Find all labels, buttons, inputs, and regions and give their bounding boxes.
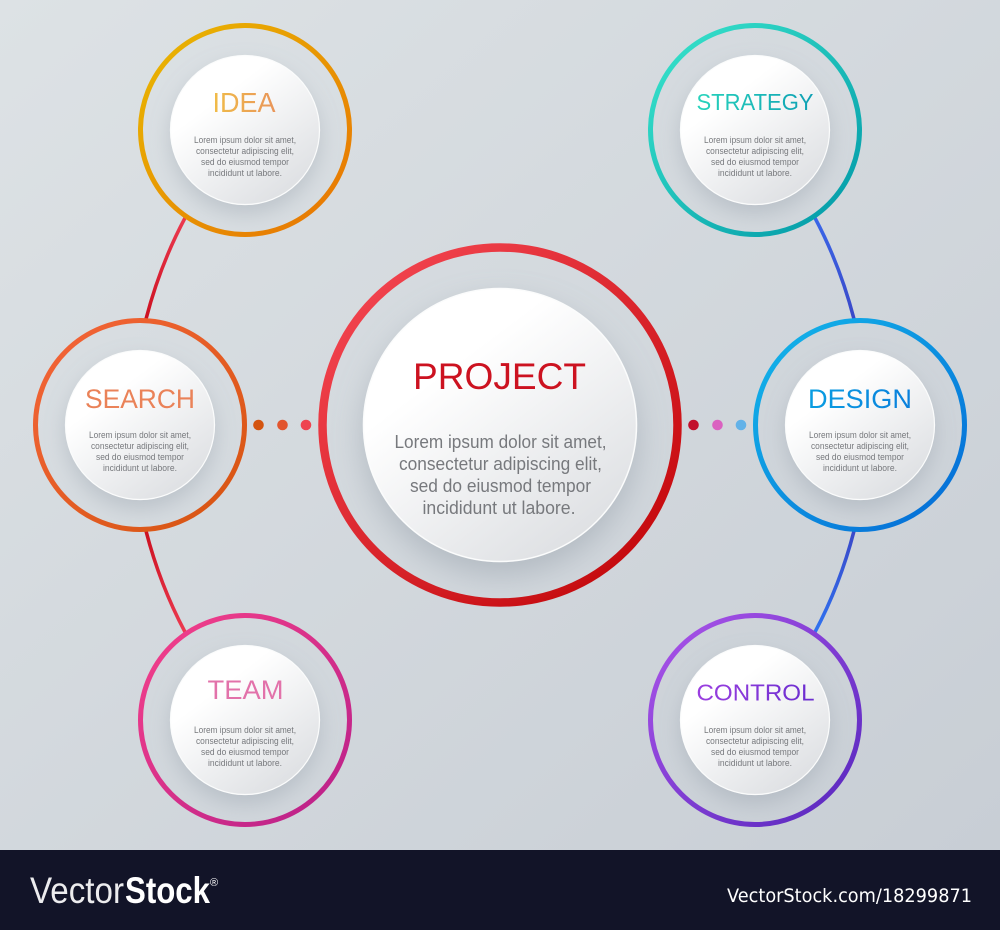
control text bbox=[704, 725, 806, 768]
panel: design bbox=[756, 320, 964, 530]
project disc bbox=[364, 288, 636, 562]
control heading: CONTROL bbox=[696, 680, 814, 706]
project ring bbox=[322, 248, 678, 602]
team text: incididunt ut labore. bbox=[208, 758, 282, 768]
team ring bbox=[140, 616, 350, 824]
strategy text: Lorem ipsum dolor sit amet, bbox=[704, 135, 806, 145]
connector: idea to search bbox=[146, 218, 185, 319]
search disc bbox=[66, 350, 214, 500]
idea text bbox=[194, 135, 296, 178]
design text: Lorem ipsum dolor sit amet, bbox=[809, 430, 911, 440]
idea text: consectetur adipiscing elit, bbox=[196, 146, 294, 156]
idea text: sed do eiusmod tempor bbox=[201, 157, 289, 167]
strategy disc bbox=[680, 56, 830, 204]
design heading: DESIGN bbox=[808, 384, 912, 414]
idea text: Lorem ipsum dolor sit amet, bbox=[194, 135, 296, 145]
design disc bbox=[786, 350, 934, 500]
idea heading: IDEA bbox=[212, 87, 276, 118]
panel: project bbox=[322, 248, 678, 602]
team heading: TEAM bbox=[208, 675, 284, 705]
project text: incididunt ut labore. bbox=[422, 498, 576, 518]
team text bbox=[194, 725, 296, 768]
control text: consectetur adipiscing elit, bbox=[706, 736, 804, 746]
control disc bbox=[680, 646, 830, 794]
panel: search bbox=[36, 320, 244, 530]
footer logo: ® bbox=[210, 877, 218, 889]
control ring bbox=[650, 616, 860, 824]
search text: consectetur adipiscing elit, bbox=[91, 441, 189, 451]
panel: team bbox=[140, 616, 350, 824]
team text: Lorem ipsum dolor sit amet, bbox=[194, 725, 296, 735]
project text: consectetur adipiscing elit, bbox=[399, 454, 602, 474]
dotted link: search to project bbox=[253, 420, 311, 430]
team text: sed do eiusmod tempor bbox=[201, 747, 289, 757]
strategy text: incididunt ut labore. bbox=[718, 168, 792, 178]
footer logo: Stock bbox=[125, 870, 210, 911]
footer bar bbox=[0, 850, 1000, 930]
control text: sed do eiusmod tempor bbox=[711, 747, 799, 757]
team text: consectetur adipiscing elit, bbox=[196, 736, 294, 746]
strategy text: consectetur adipiscing elit, bbox=[706, 146, 804, 156]
panel: strategy bbox=[650, 26, 860, 234]
project text bbox=[394, 432, 606, 518]
panel: control bbox=[650, 616, 860, 824]
search text: Lorem ipsum dolor sit amet, bbox=[89, 430, 191, 440]
idea disc bbox=[170, 56, 320, 204]
search text bbox=[89, 430, 191, 473]
design ring bbox=[756, 320, 964, 530]
design text bbox=[809, 430, 911, 473]
search heading: SEARCH bbox=[85, 384, 195, 414]
project text: Lorem ipsum dolor sit amet, bbox=[394, 432, 606, 452]
control text: Lorem ipsum dolor sit amet, bbox=[704, 725, 806, 735]
search ring bbox=[36, 320, 244, 530]
design text: sed do eiusmod tempor bbox=[816, 452, 904, 462]
connector: search to team bbox=[146, 531, 185, 632]
strategy text bbox=[704, 135, 806, 178]
footer image id: VectorStock.com/18299871 bbox=[727, 885, 972, 907]
footer logo: Vector bbox=[30, 870, 124, 911]
search text: incididunt ut labore. bbox=[103, 463, 177, 473]
design text: consectetur adipiscing elit, bbox=[811, 441, 909, 451]
panel: idea bbox=[140, 26, 350, 234]
control text: incididunt ut labore. bbox=[718, 758, 792, 768]
idea ring bbox=[140, 26, 350, 234]
strategy text: sed do eiusmod tempor bbox=[711, 157, 799, 167]
project heading: PROJECT bbox=[413, 356, 586, 397]
search text: sed do eiusmod tempor bbox=[96, 452, 184, 462]
connector: strategy to design bbox=[815, 218, 854, 319]
footer logo bbox=[30, 870, 218, 911]
strategy heading: STRATEGY bbox=[696, 89, 814, 115]
team disc bbox=[170, 646, 320, 794]
design text: incididunt ut labore. bbox=[823, 463, 897, 473]
connector: design to control bbox=[815, 531, 854, 632]
idea text: incididunt ut labore. bbox=[208, 168, 282, 178]
project text: sed do eiusmod tempor bbox=[410, 476, 591, 496]
dotted link: project to design bbox=[688, 420, 746, 430]
strategy ring bbox=[650, 26, 860, 234]
